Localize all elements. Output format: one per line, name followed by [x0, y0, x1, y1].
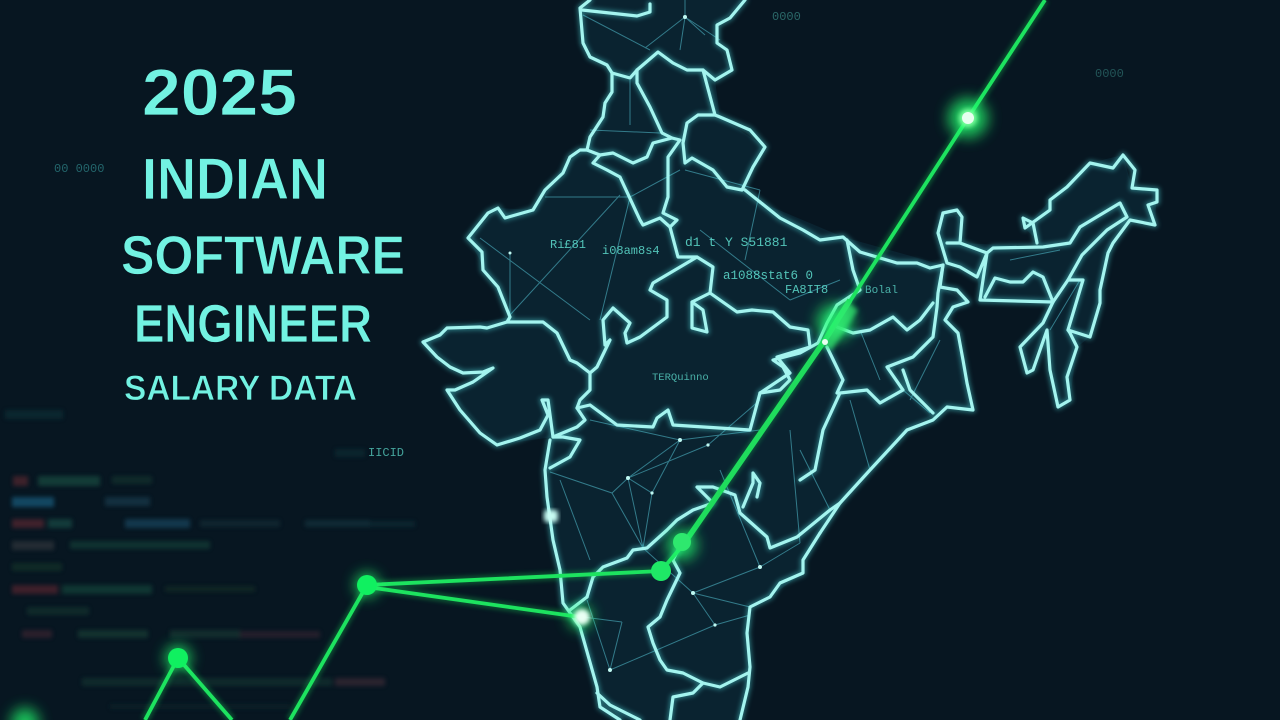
map ghost text: TERQuinno	[652, 372, 709, 384]
trend line	[145, 0, 1045, 720]
subtitle: SALARY DATA	[124, 369, 357, 408]
map of India	[423, 0, 1157, 720]
map outline glow	[423, 0, 1157, 720]
title: software: SOFTWARE	[121, 224, 405, 286]
faint ghost labels: 0000	[772, 10, 801, 24]
faint ghost labels: 0000	[1095, 67, 1124, 81]
map fill tint	[423, 0, 1157, 720]
data point glows	[11, 98, 988, 720]
map ghost text: FA8IT8	[785, 283, 828, 297]
title: year: 2025	[142, 55, 297, 129]
trend line thick lower segment	[683, 300, 850, 545]
map ghost text: a1088stat6 0	[723, 269, 813, 283]
network mesh lines	[480, 0, 1080, 670]
map ghost text: Bolal	[865, 285, 898, 297]
title: engineer: ENGINEER	[134, 294, 372, 354]
faint ghost labels: 00 0000	[54, 162, 104, 176]
data points	[168, 109, 977, 668]
map ghost text	[550, 235, 898, 384]
trend line glow	[145, 0, 1045, 720]
map ghost text: Y S51881	[725, 235, 788, 250]
map outline	[423, 0, 1157, 720]
title: indian: INDIAN	[142, 147, 328, 212]
network nodes	[508, 15, 762, 672]
blurred code panel	[5, 410, 415, 709]
faint ghost labels	[54, 10, 1124, 460]
title block	[121, 55, 405, 408]
map ghost text: i08am8s4	[602, 244, 660, 258]
map ghost text: Ri£81	[550, 238, 586, 252]
faint ghost labels: IICID	[368, 446, 404, 460]
map ghost text: d1 t	[685, 235, 716, 250]
